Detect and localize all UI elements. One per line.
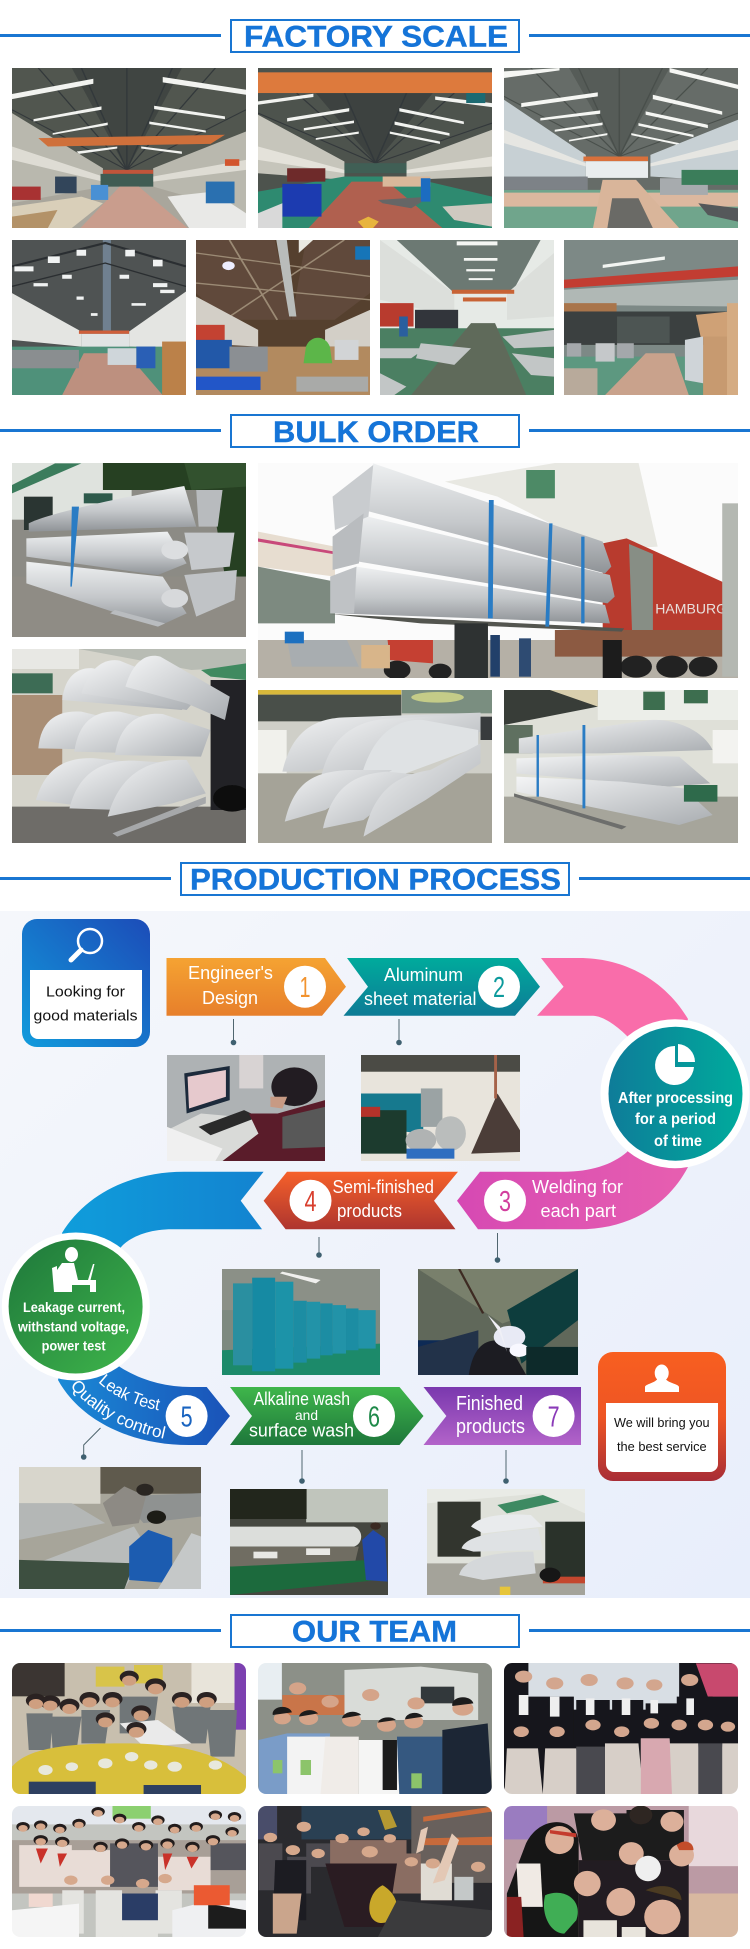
- circle: after processing: After processing: [618, 1090, 733, 1107]
- photo: engineer at computer: [167, 1055, 325, 1161]
- connector: step 6 to photo: [299, 1450, 305, 1484]
- circle: after processing: [600, 1019, 750, 1168]
- circle: after processing: of time: [654, 1133, 702, 1150]
- card: we will bring you the best service: the best service: [617, 1439, 707, 1454]
- step 4: semi-finished products: products: [337, 1201, 402, 1221]
- step 1: engineer's design: Engineer's: [188, 963, 273, 983]
- step 1: engineer's design: [166, 958, 346, 1016]
- step 4: semi-finished products: Semi-finished: [332, 1177, 434, 1197]
- step 2: aluminum sheet material: Aluminum: [384, 965, 463, 985]
- panel: process flow: [0, 911, 750, 1598]
- card: looking for good materials: good materials: [34, 1008, 138, 1024]
- card: looking for good materials: [22, 919, 150, 1047]
- circle: leak test details: power test: [42, 1338, 106, 1354]
- step 6: alkaline wash and surface wash: [230, 1387, 424, 1445]
- heading: our team: [0, 1615, 750, 1649]
- heading: our team: OUR TEAM: [292, 1616, 457, 1649]
- photo: alkaline wash tank: [230, 1489, 388, 1595]
- heading: bulk order: BULK ORDER: [273, 416, 479, 449]
- step 1: engineer's design: 1: [300, 972, 310, 1004]
- heading: factory scale: FACTORY SCALE: [244, 21, 508, 54]
- card: looking for good materials: Looking for: [46, 984, 125, 1000]
- step 7: finished products: [424, 1387, 581, 1445]
- step 5 ribbon: leak test quality control: Quality control: [72, 1381, 166, 1438]
- connector: step 4 to photo: [316, 1237, 322, 1258]
- photo: factory hall with brown roof: [196, 240, 370, 395]
- connector: step 1 to photo: [231, 1019, 236, 1045]
- connector: step 2 to photo: [396, 1019, 402, 1045]
- step 6: alkaline wash and surface wash: surface wash: [249, 1421, 354, 1441]
- step 7: finished products: Finished: [456, 1393, 523, 1415]
- step 7: finished products: products: [456, 1416, 525, 1438]
- heading: factory scale: [0, 20, 750, 54]
- step 2: aluminum sheet material: sheet material: [364, 989, 476, 1009]
- section: our team: [0, 1615, 750, 1937]
- ribbon: pink lower curve with step 3: each part: [540, 1201, 616, 1221]
- photo: team in formal wear: [504, 1663, 738, 1794]
- photo: leak test workers: [19, 1467, 201, 1589]
- photo: team at exhibition with caravan: [258, 1663, 492, 1794]
- connector: step 5 to photo: [81, 1428, 100, 1460]
- heading: production process: [0, 863, 750, 896]
- photo: semi-finished blue rolls: [222, 1269, 380, 1375]
- photo: factory hall with green floor and aluminum sheets: [380, 240, 554, 395]
- step 4: semi-finished products: [264, 1172, 458, 1229]
- circle: after processing: for a period: [635, 1111, 716, 1128]
- icon: magnifier: [71, 929, 102, 960]
- photo: team party with balloons: [258, 1806, 492, 1937]
- photo: boats stacked on forklift: [12, 649, 246, 843]
- circle: leak test details: withstand voltage,: [17, 1319, 129, 1335]
- photo: large team group with red scarves: [12, 1806, 246, 1937]
- step 5 ribbon: leak test quality control: Leak Test: [98, 1374, 160, 1410]
- photo: stacked pontoons outdoors: [12, 463, 246, 637]
- step 4: semi-finished products: 4: [304, 1186, 316, 1218]
- step 1: engineer's design: Design: [202, 988, 258, 1008]
- step 6: alkaline wash and surface wash: 6: [368, 1402, 380, 1434]
- section: production process: [0, 862, 750, 1598]
- step 2: aluminum sheet material: 2: [493, 972, 505, 1004]
- heading: production process: PRODUCTION PROCESS: [190, 864, 561, 896]
- photo: pontoons loaded on truck container: [258, 463, 738, 678]
- section: factory scale: [0, 20, 750, 395]
- ribbon: pink lower curve with step 3: Welding for: [532, 1177, 623, 1197]
- ribbon: pink upper curve: [537, 958, 688, 1100]
- photo: bright factory hall: [504, 68, 738, 228]
- ribbon: blue curve: [62, 1172, 264, 1300]
- circle: leak test details: Leakage current,: [23, 1299, 125, 1315]
- heading: bulk order: [0, 415, 750, 449]
- photo: factory hall with orange crane: [12, 68, 246, 228]
- step 7: finished products: 7: [548, 1402, 560, 1434]
- section: bulk order: [0, 415, 750, 843]
- step 2: aluminum sheet material: [344, 958, 540, 1016]
- ribbon: pink lower curve with step 3: 3: [499, 1186, 511, 1218]
- step 6: alkaline wash and surface wash: Alkaline wash: [254, 1389, 350, 1409]
- connector: step 7 to photo: [503, 1450, 509, 1484]
- icon: person at laptop: [52, 1247, 96, 1292]
- photo: aluminum sheet material: [361, 1055, 520, 1161]
- icon: person bust: [645, 1364, 679, 1392]
- photo: team with minion toys: [12, 1663, 246, 1794]
- card: we will bring you the best service: [598, 1352, 726, 1481]
- connector: step 3 to photo: [495, 1233, 500, 1263]
- photo: welding: [418, 1269, 578, 1375]
- card: we will bring you the best service: We will bring you: [614, 1415, 710, 1430]
- step 5 ribbon: leak test quality control: [58, 1366, 230, 1445]
- photo: boats on yard with canopy: [258, 690, 492, 843]
- photo: team in halloween costumes: [504, 1806, 738, 1937]
- photo: finished products on forklift: [427, 1489, 585, 1595]
- photo: factory hall with steel trusses: [12, 240, 186, 395]
- photo: factory hall with red crane and cartons: [564, 240, 738, 395]
- photo: stacked boats on rolling rack: [504, 690, 738, 843]
- ribbon: pink lower curve with step 3: [457, 1100, 688, 1229]
- step 5 ribbon: leak test quality control: 5: [181, 1402, 193, 1434]
- photo: factory hall with overhead crane in foreground: [258, 68, 492, 228]
- circle: leak test details: [2, 1232, 230, 1445]
- step 6: alkaline wash and surface wash: and: [295, 1407, 318, 1423]
- icon: pie chart: [655, 1044, 695, 1085]
